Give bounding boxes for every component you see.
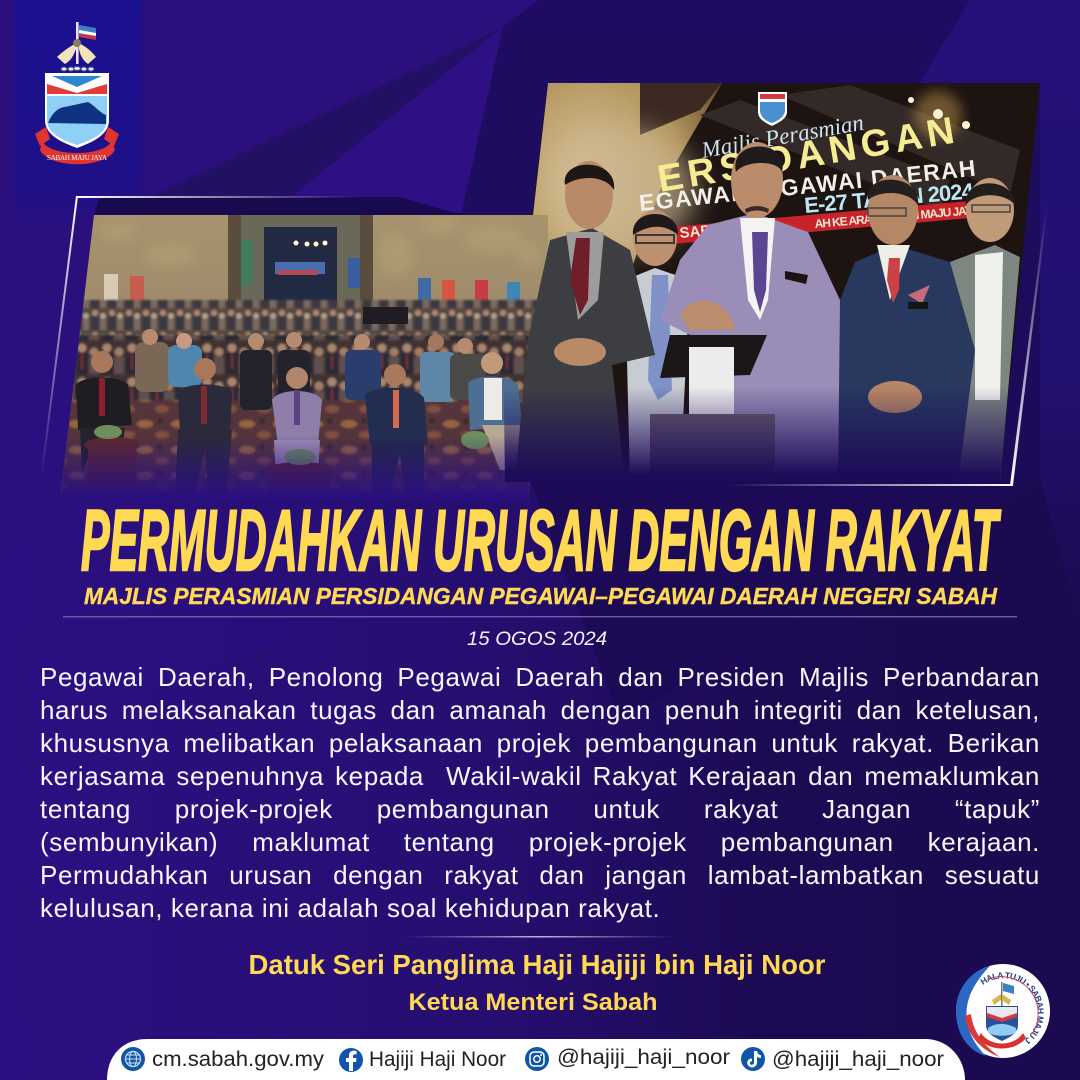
photo: audience group photo (50, 215, 560, 505)
body text: kelulusan, kerana ini adalah soal kehidupan rakyat. (40, 893, 660, 923)
name of chief minister: Datuk Seri Panglima Haji Hajiji bin Haji Noor (248, 949, 826, 980)
stage text (640, 117, 975, 244)
date: 15 OGOS 2024 (467, 629, 607, 650)
emblem: Sabah coat of arms: SABAH MAJU JAYA (47, 154, 107, 162)
facebook name: Hajiji Haji Noor (369, 1048, 506, 1071)
person: left with red tie (515, 161, 655, 482)
photo background: ceremony stage backdrop (532, 83, 1040, 468)
body text: harus melaksanakan tugas dan amanah dengan penuh integriti dan ketelusan, (40, 695, 1040, 725)
body text: khususnya melibatkan pelaksanaan projek pembangunan untuk rakyat. Berikan (40, 728, 1040, 758)
body text (40, 662, 1040, 923)
icon: tiktok (741, 1047, 765, 1071)
frame lines around the photos (40, 196, 1048, 486)
stage text: SABAH (679, 220, 733, 242)
body text: Permudahkan urusan dengan rakyat dan jangan lambat-lambatkan sesuatu (40, 860, 1040, 890)
podium with plunger box (650, 335, 775, 468)
body text: tentang projek-projek pembangunan untuk rakyat Jangan “tapuk” (40, 794, 1040, 824)
instagram handle: @hajiji_haji_noor (557, 1046, 730, 1069)
stage text: Majlis Perasmian (699, 110, 866, 163)
icon: website globe (121, 1047, 145, 1071)
stage crest (758, 92, 787, 126)
position title: Ketua Menteri Sabah (408, 989, 658, 1016)
stage text: EGAWAI-PEGAWAI DAERAH (638, 155, 977, 216)
subtitle: MAJLIS PERASMIAN PERSIDANGAN PEGAWAI–PEGAWAI DAERAH NEGERI SABAH (84, 583, 998, 609)
tiktok handle: @hajiji_haji_noor (772, 1048, 944, 1071)
body text: kerjasama sepenuhnya kepada Wakil-wakil Rakyat Kerajaan dan memaklumkan (40, 761, 1040, 791)
stage text: ERSIDANGAN (655, 110, 957, 201)
body text: Pegawai Daerah, Penolong Pegawai Daerah dan Presiden Majlis Perbandaran (40, 662, 1040, 692)
person: second left (627, 210, 688, 472)
website: cm.sabah.gov.my (152, 1048, 325, 1071)
body text: (sembunyikan) maklumat tentang projek-projek pembangunan kerajaan. (40, 827, 1040, 857)
person: centre in lavender suit (660, 142, 840, 482)
icon: instagram (525, 1047, 549, 1071)
stage text: E-27 TAHUN 2024 (803, 178, 976, 218)
icon: facebook (339, 1048, 363, 1072)
photo: leaders on stage at the launch (504, 142, 1020, 482)
person: far right (950, 178, 1020, 482)
round logo: Hala Tuju Sabah Maju Jaya: HALA TUJU • SABAH MAJU JAYA (980, 972, 1044, 1044)
footer contact bar (107, 1039, 965, 1080)
stage text: AH KE ARAH SABAH MAJU JAYA (814, 203, 980, 231)
person: right in navy suit (835, 175, 975, 482)
emblem: Sabah coat of arms (35, 22, 119, 164)
